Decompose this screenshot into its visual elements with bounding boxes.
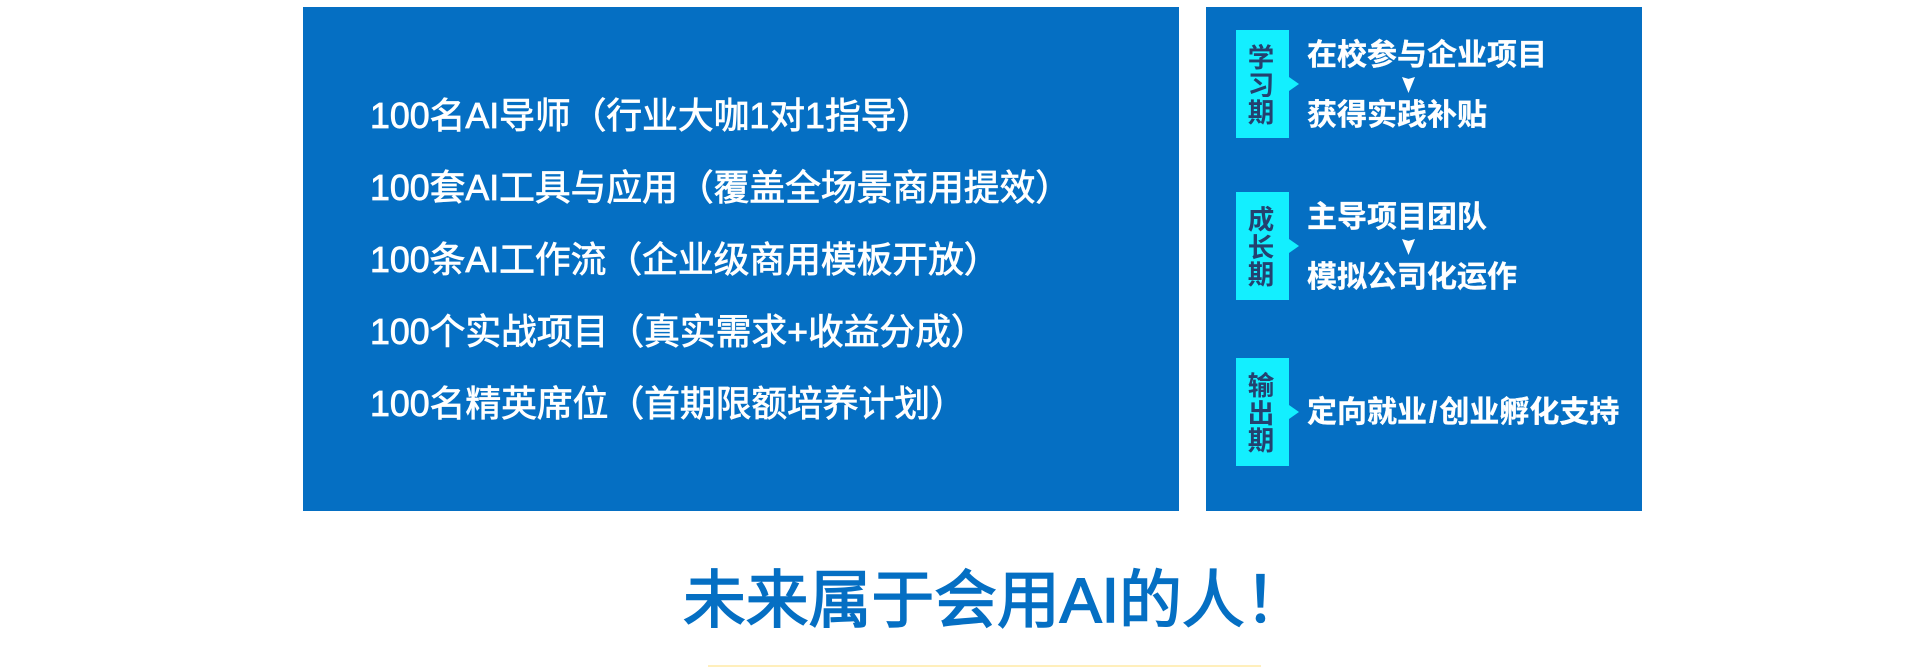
arrow: growth stage bbox=[1402, 239, 1415, 255]
tag: growth stage: 长 bbox=[1248, 232, 1274, 262]
text: output stage: 定向就业/创业孵化支持 bbox=[1307, 396, 1619, 429]
text: projects: 100个实战项目（真实需求+收益分成） bbox=[370, 312, 987, 352]
panel: resources list bbox=[303, 7, 1179, 511]
tag: output stage: 输 bbox=[1248, 371, 1274, 401]
tag: learning stage bbox=[1236, 30, 1289, 138]
text: growth step 1: 主导项目团队 bbox=[1307, 201, 1487, 234]
tag: growth stage bbox=[1236, 192, 1289, 300]
bottom stripe bbox=[708, 665, 1261, 667]
arrow: learning stage bbox=[1402, 77, 1415, 93]
text: learning step 2: 获得实践补贴 bbox=[1307, 99, 1487, 132]
tag: learning stage: 期 bbox=[1248, 98, 1274, 128]
tag: output stage: 出 bbox=[1248, 398, 1274, 428]
tag: growth stage: 成 bbox=[1248, 205, 1274, 235]
tag: growth stage: 期 bbox=[1248, 260, 1274, 290]
tag: learning stage: 习 bbox=[1248, 70, 1274, 100]
tag: learning stage: 学 bbox=[1248, 43, 1274, 73]
panel: growth stages bbox=[1206, 7, 1642, 511]
text: AI tools: 100套AI工具与应用（覆盖全场景商用提效） bbox=[370, 168, 1071, 208]
tag: output stage bbox=[1236, 358, 1289, 466]
text: AI mentors: 100名AI导师（行业大咖1对1指导） bbox=[370, 96, 932, 136]
text: learning step 1: 在校参与企业项目 bbox=[1307, 39, 1547, 72]
text: elite seats: 100名精英席位（首期限额培养计划） bbox=[370, 384, 966, 424]
text: growth step 2: 模拟公司化运作 bbox=[1307, 261, 1517, 294]
tag: output stage: 期 bbox=[1248, 426, 1274, 456]
title: 未来属于会用AI的人！ bbox=[683, 566, 1308, 636]
text: AI workflows: 100条AI工作流（企业级商用模板开放） bbox=[370, 240, 1000, 280]
